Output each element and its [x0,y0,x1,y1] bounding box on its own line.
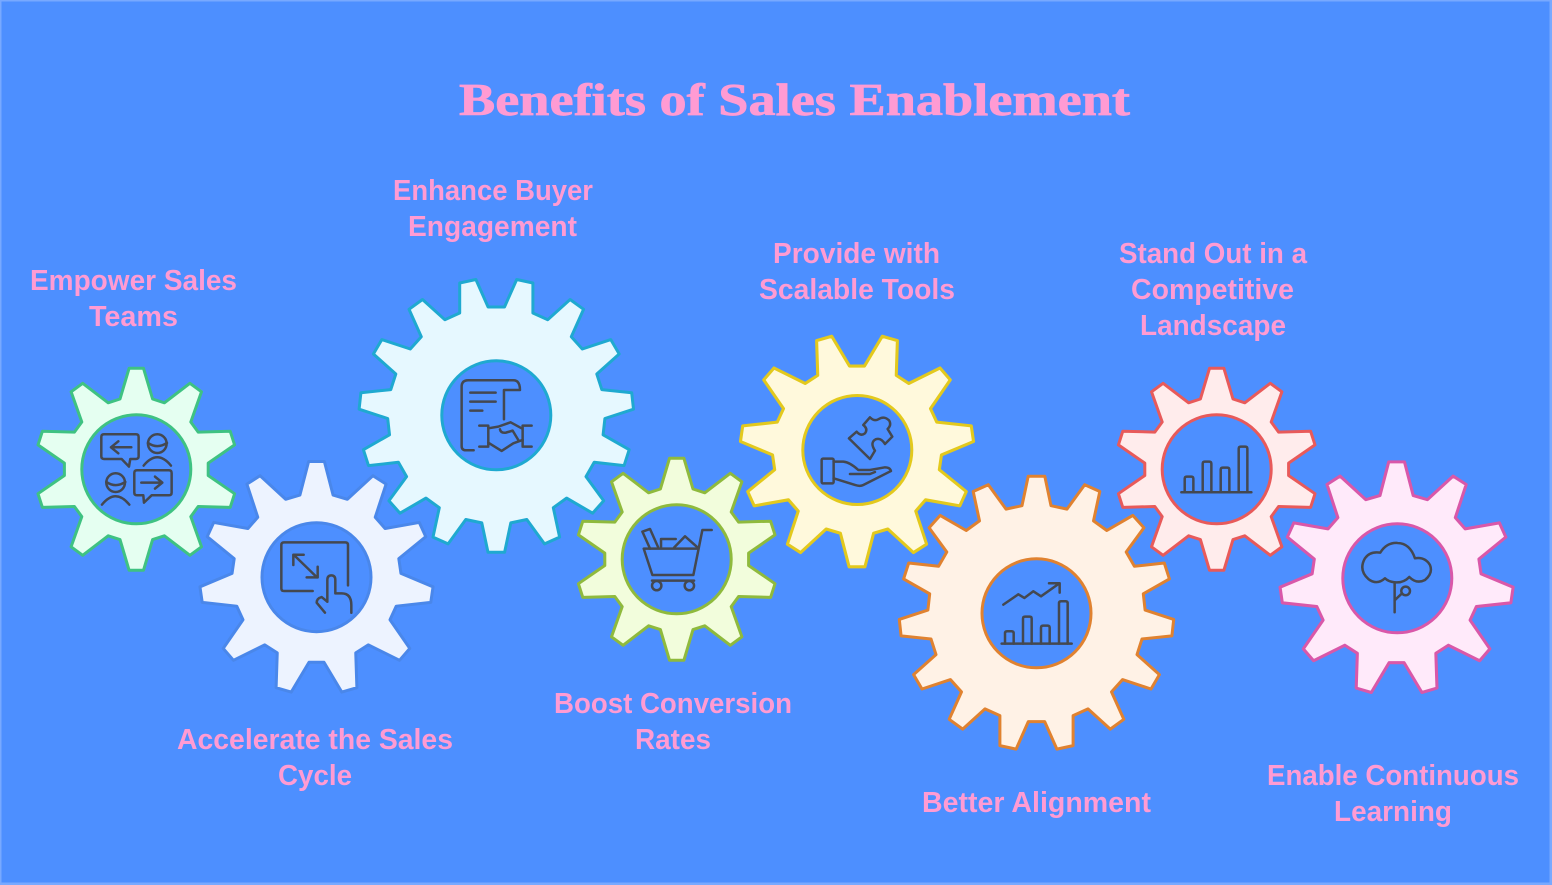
label: Stand Out in a Competitive Landscape: Stand Out in a [1119,238,1308,270]
gear shape: alignment [899,476,1174,749]
panel: gear 4 Boost Conversion Rates [578,458,775,660]
panel: gear 6 Better Alignment [899,476,1174,749]
panel: gear 8 Enable Continuous Learning [1280,462,1513,692]
gear shape: empower [38,368,235,570]
hub: alignment [982,559,1091,668]
label: Boost Conversion Rates: Rates [635,724,711,756]
label: Enable Continuous Learning: Learning [1334,796,1452,828]
label: Empower Sales Teams: Empower Sales [30,265,237,297]
label: Provide with Scalable Tools [759,238,955,306]
panel: gear 3 Enhance Buyer Engagement [359,279,634,552]
gear shape: accelerate [200,461,433,692]
label: Boost Conversion Rates [554,688,792,756]
icon: people talking [101,434,172,505]
panel: gear 5 Provide with Scalable Tools [740,336,974,567]
gear shape: stand out [1118,368,1315,570]
icon: hand with puzzle piece [822,417,892,486]
panel: gear 2 Accelerate the Sales Cycle [200,461,433,692]
hub: provide [803,396,912,504]
label: Stand Out in a Competitive Landscape: Landscape [1140,310,1286,342]
label: Empower Sales Teams [30,265,237,333]
label: Accelerate the Sales Cycle: Cycle [278,760,352,792]
icon: cloud tree [1362,543,1431,612]
label: Stand Out in a Competitive Landscape [1119,238,1308,342]
gear shape: learning [1280,462,1513,692]
hub: enhance [442,361,551,470]
label: Enhance Buyer Engagement: Engagement [408,211,577,243]
gear shape: provide [740,336,974,567]
label: Stand Out in a Competitive Landscape: Competitive [1131,274,1294,306]
panel: gear 1 Empower Sales Teams [38,368,235,570]
label: Enable Continuous Learning: Enable Continuous [1267,760,1519,792]
icon: contract handshake [462,380,532,451]
icon: bar chart [1181,447,1251,492]
gear shape: boost [578,458,775,660]
label: Enhance Buyer Engagement [393,175,593,243]
label: Accelerate the Sales Cycle: Accelerate the Sales [177,724,453,756]
label: Accelerate the Sales Cycle [177,724,453,792]
icon: shopping cart [642,529,712,590]
hub: learning [1343,524,1452,633]
label: Provide with Scalable Tools: Provide with [773,238,940,270]
hub: stand out [1162,415,1271,524]
label: Enhance Buyer Engagement: Enhance Buyer [393,175,593,207]
gear shape: enhance [359,279,634,552]
label: Better Alignment: Better Alignment [922,787,1151,819]
label: Empower Sales Teams: Teams [89,301,178,333]
icon: resize touch screen [281,542,351,613]
label: Boost Conversion Rates: Boost Conversion [554,688,792,720]
hub: accelerate [262,523,371,632]
icon: rising bar chart with arrow [1002,583,1072,644]
hub: empower [82,415,191,524]
hub: boost [622,505,731,614]
label: Provide with Scalable Tools: Scalable Tools [759,274,955,306]
label: Enable Continuous Learning [1267,760,1519,828]
panel: gear 7 Stand Out in a Competitive Landscape [1118,368,1315,570]
title: Benefits of Sales Enablement [459,74,1131,125]
